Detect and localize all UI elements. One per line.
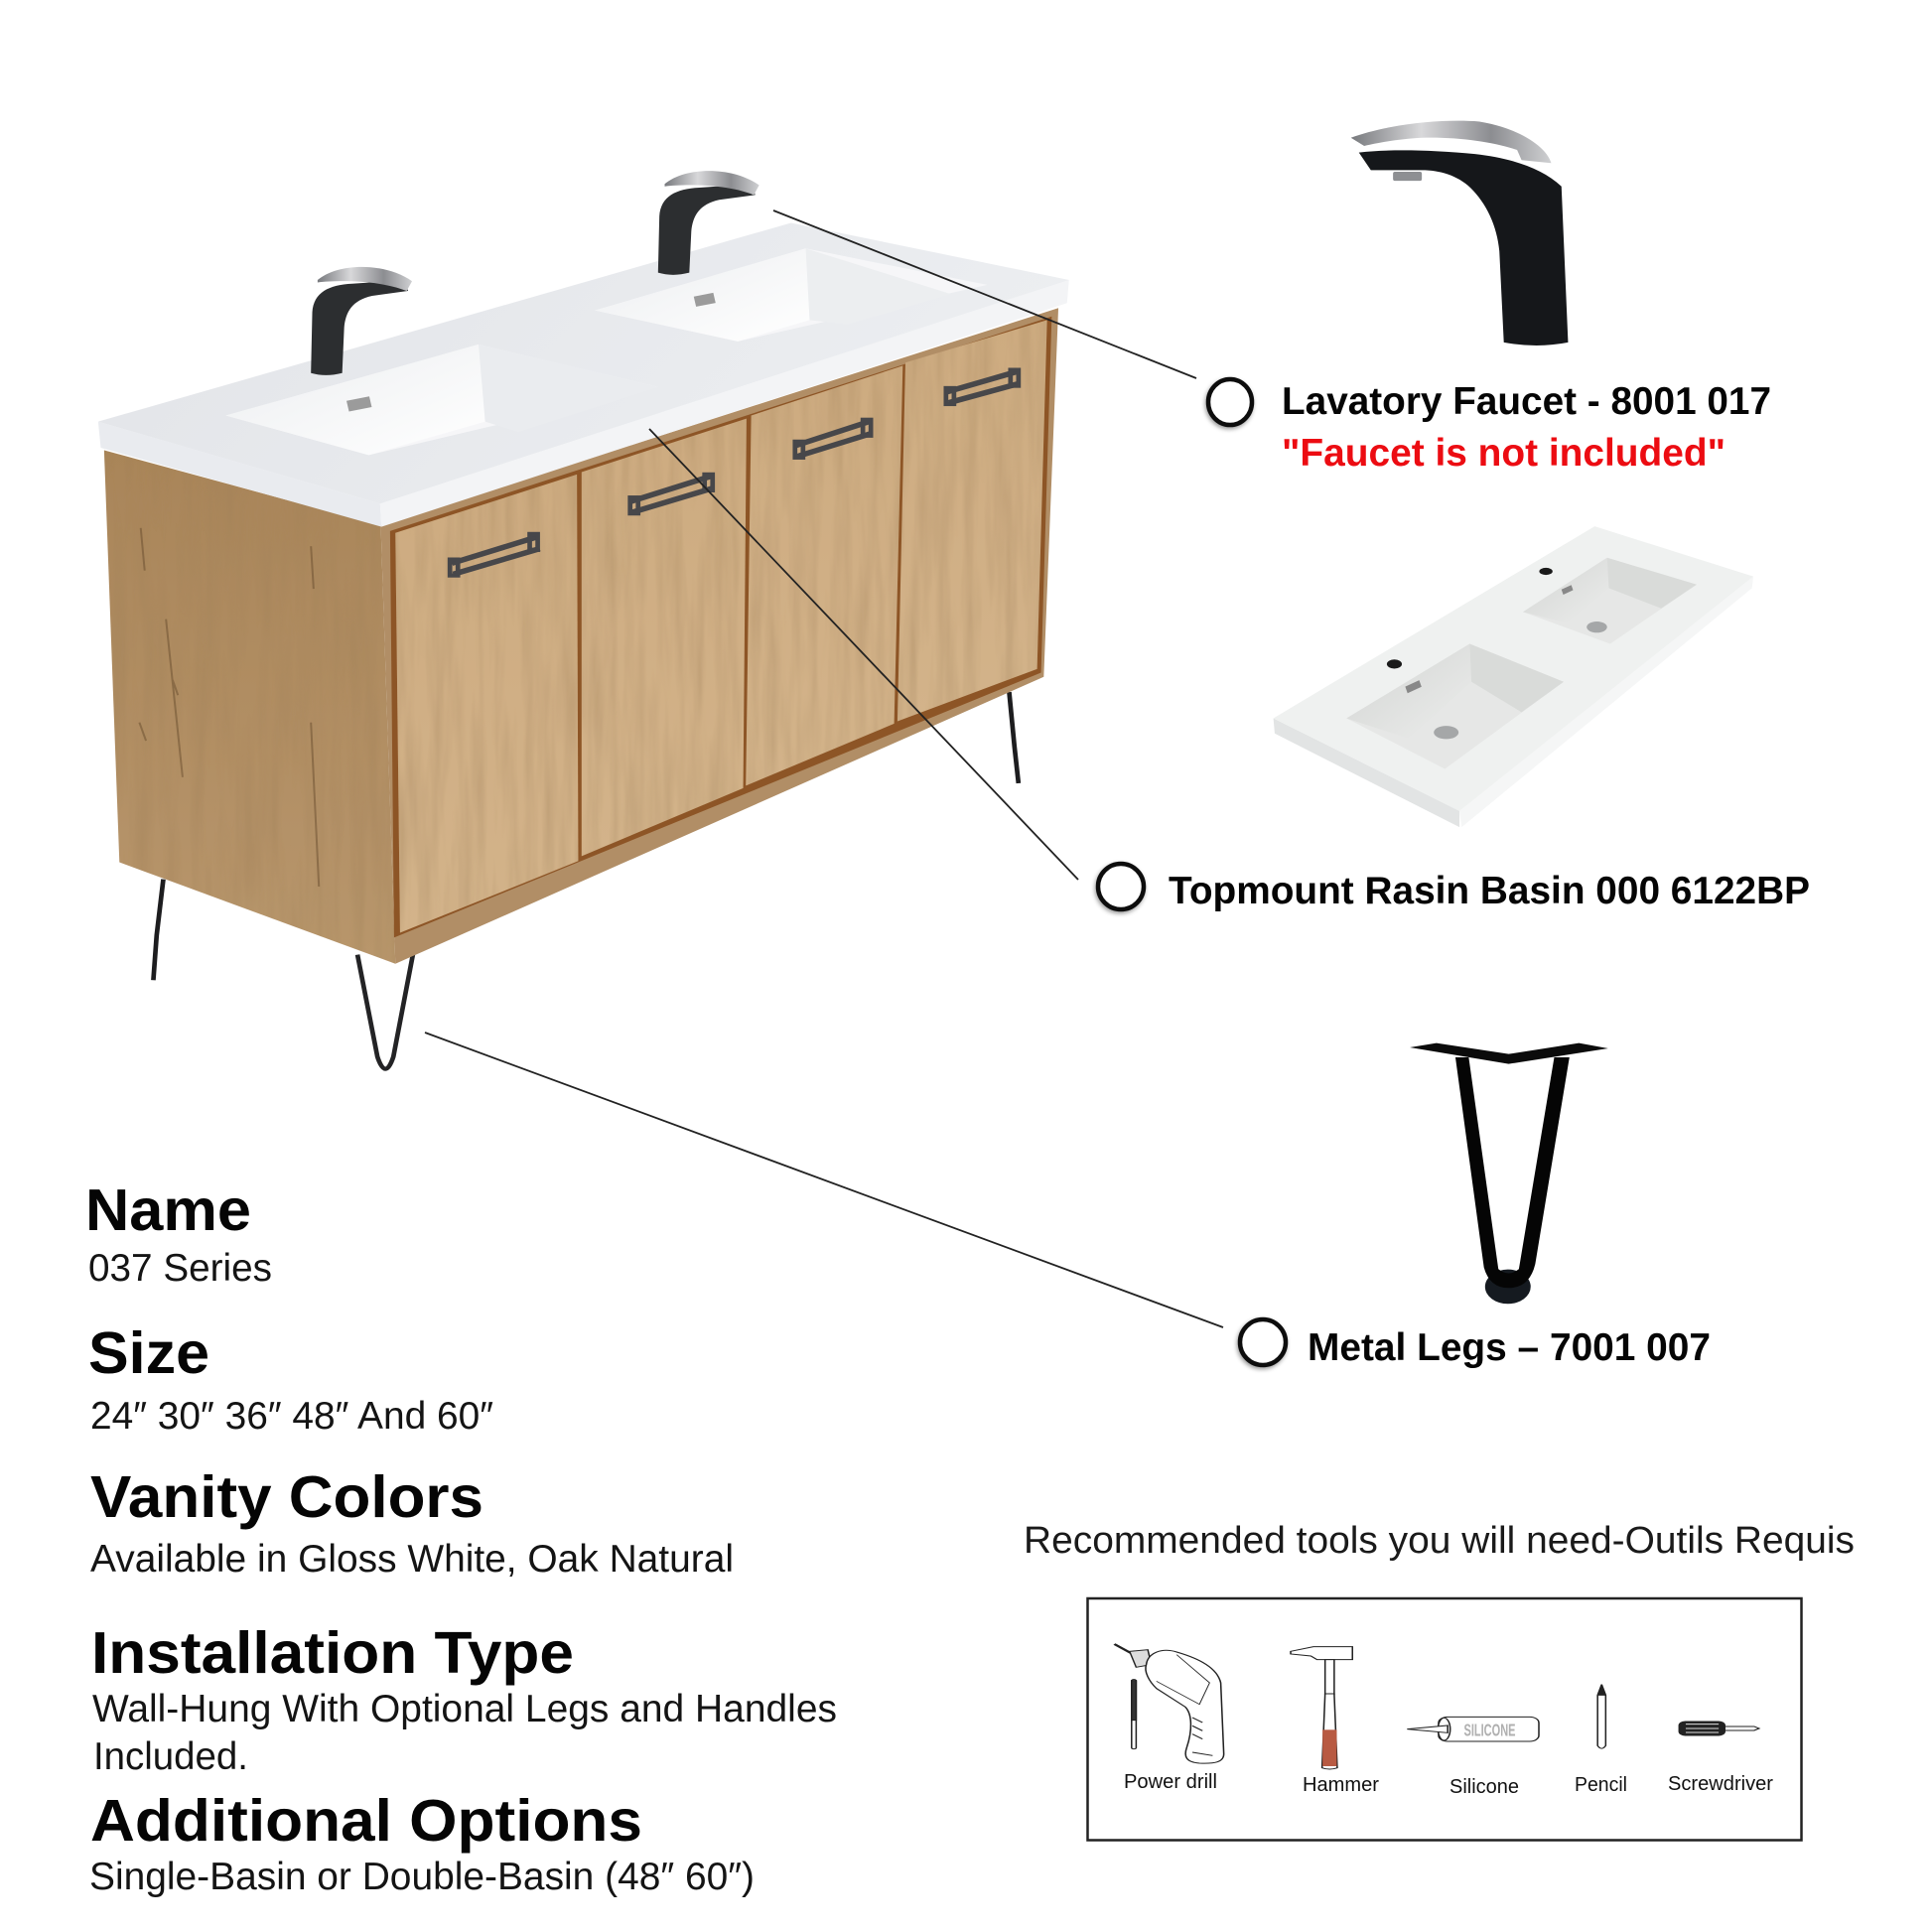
icon: silicone tube	[1407, 1717, 1539, 1741]
label: lavatory faucet: Lavatory Faucet - 8001 017	[1282, 380, 1771, 423]
faucet black body	[1359, 150, 1568, 345]
icon: silicone tube: SILICONE	[1463, 1721, 1516, 1740]
label: screwdriver: Screwdriver	[1668, 1773, 1773, 1795]
door gaps	[390, 317, 1051, 937]
faucet aerator	[1393, 172, 1422, 181]
handle one	[450, 534, 540, 576]
label: power drill: Power drill	[1124, 1771, 1217, 1793]
basin product image	[1274, 526, 1753, 827]
label: hammer: Hammer	[1303, 1774, 1379, 1796]
spec: name heading: Name	[85, 1177, 251, 1243]
faucet product image	[1351, 121, 1568, 345]
handle three	[795, 420, 872, 458]
leader line: legs	[425, 1033, 1223, 1327]
icon: hammer	[1291, 1647, 1352, 1769]
leg foot	[1485, 1270, 1531, 1304]
spec: size heading: Size	[88, 1320, 209, 1386]
icon: pencil	[1597, 1685, 1605, 1748]
door two	[582, 419, 747, 856]
leader line: basin	[649, 429, 1078, 880]
spec: name value: 037 Series	[88, 1247, 272, 1290]
right basin	[595, 248, 987, 342]
spec: vanity colors heading: Vanity Colors	[90, 1464, 483, 1530]
right bowl	[1523, 558, 1697, 643]
cabinet front frame	[381, 308, 1058, 964]
spec: additional options value: Single-Basin or Double-Basin (48″ 60″)	[89, 1856, 755, 1898]
spec: installation type heading: Installation Type	[91, 1620, 574, 1686]
label: metal legs: Metal Legs – 7001 007	[1308, 1326, 1711, 1369]
wood grain	[139, 528, 319, 887]
basin right edge	[1459, 577, 1753, 827]
right faucet	[658, 171, 759, 275]
handle two	[630, 475, 714, 513]
handle four	[946, 370, 1020, 404]
spec: installation type value	[92, 1688, 837, 1778]
back left leg	[153, 880, 163, 980]
countertop front left edge	[98, 422, 381, 527]
tools panel border	[1088, 1598, 1801, 1841]
back right leg	[1009, 692, 1019, 783]
spec: vanity colors value: Available in Gloss White, Oak Natural	[90, 1538, 734, 1581]
label: pencil: Pencil	[1575, 1774, 1627, 1796]
faucet chrome lever	[1351, 121, 1551, 163]
label: silicone: Silicone	[1449, 1776, 1519, 1798]
icon: screwdriver	[1679, 1722, 1759, 1735]
left basin	[225, 345, 658, 455]
vanity cabinet illustration	[98, 171, 1069, 1069]
door one	[395, 475, 578, 933]
basin top face	[1274, 526, 1753, 811]
door four	[897, 320, 1047, 721]
callout marker: faucet	[1208, 379, 1252, 425]
callout marker: basin	[1098, 864, 1144, 909]
basin left edge	[1274, 718, 1459, 827]
countertop front right edge	[380, 280, 1069, 527]
cabinet side panel	[104, 450, 395, 964]
left bowl	[1346, 643, 1564, 768]
spec: additional options heading: Additional Options	[90, 1788, 642, 1854]
label: topmount basin: Topmount Rasin Basin 000 6122BP	[1169, 870, 1810, 912]
spec: installation type value: Wall-Hung With Optional Legs and Handles	[92, 1688, 837, 1730]
front hairpin leg	[357, 952, 413, 1069]
tools heading: Recommended tools you will need-Outils Requis	[1024, 1520, 1855, 1562]
countertop top face	[98, 222, 1069, 503]
spec: installation type value: Included.	[93, 1735, 248, 1778]
callout marker: legs	[1240, 1319, 1286, 1365]
icon: power drill	[1114, 1644, 1224, 1763]
leg rods	[1455, 1057, 1570, 1288]
leg mounting plate	[1410, 1043, 1608, 1064]
leader line: faucet	[773, 210, 1196, 378]
tools panel	[1088, 1598, 1801, 1841]
spec: size value: 24″ 30″ 36″ 48″ And 60″	[90, 1395, 493, 1438]
label: faucet not included: "Faucet is not included"	[1282, 432, 1725, 475]
metal leg product image	[1410, 1043, 1608, 1304]
door three	[746, 365, 902, 785]
left faucet	[311, 267, 412, 375]
